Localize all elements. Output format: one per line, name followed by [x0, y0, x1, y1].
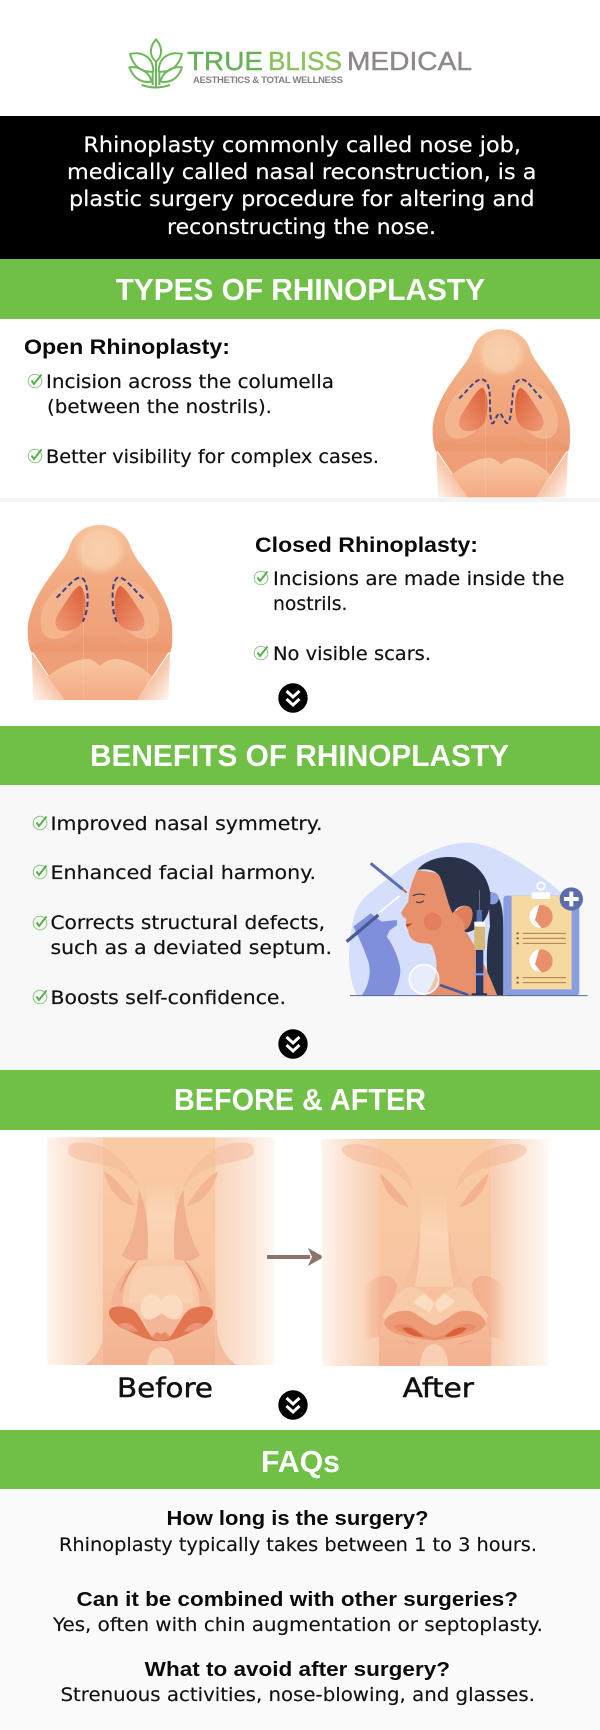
- panel: before and after: [47, 1137, 548, 1420]
- icon: check: [28, 374, 42, 388]
- heading: types of rhinoplasty: TYPES OF RHINOPLASTY: [116, 272, 485, 307]
- clipboard: [503, 896, 579, 996]
- icon: check: [33, 816, 47, 830]
- intro text: plastic surgery procedure for altering and: [69, 187, 535, 211]
- intro text: medically called nasal reconstruction, is a: [67, 160, 536, 184]
- intro text: reconstructing the nose.: [167, 215, 436, 239]
- nose illustration: closed incision: [28, 524, 172, 700]
- hair: [417, 857, 490, 932]
- bullet text: Incision across the columella: [46, 371, 334, 393]
- bullet text: [273, 568, 564, 615]
- faq 2: Can it be combined with other surgeries?: [76, 1588, 518, 1611]
- illustration: surgeon hand, patient profile and clipboard: [347, 843, 588, 996]
- icon: leaf logo: [129, 39, 182, 87]
- illustration: nose before: [47, 1137, 275, 1365]
- logo wordmark: AESTHETICS & TOTAL WELLNESS: [193, 75, 343, 86]
- after label: After: [403, 1373, 475, 1404]
- logo wordmark: MEDICAL: [347, 46, 472, 76]
- bullet text: (between the nostrils).: [47, 396, 272, 418]
- heading: benefits of rhinoplasty: BENEFITS OF RHINOPLASTY: [90, 738, 509, 773]
- open rhinoplasty heading: Open Rhinoplasty:: [24, 336, 230, 359]
- faq 1: How long is the surgery?: [166, 1507, 428, 1530]
- bullet text: [46, 371, 334, 418]
- logo wordmark: TRUE: [187, 46, 263, 76]
- panel: open rhinoplasty: [0, 328, 600, 502]
- icon: check: [33, 990, 47, 1004]
- syringe: [478, 890, 480, 910]
- ponytail: [487, 892, 503, 996]
- ground: [350, 994, 588, 997]
- icon: chevron down: [278, 683, 308, 713]
- closed rhinoplasty heading: Closed Rhinoplasty:: [255, 534, 478, 557]
- pencil: [371, 863, 403, 889]
- logo wordmark: [187, 46, 472, 86]
- faq 2: Yes, often with chin augmentation or septoplasty.: [52, 1614, 543, 1636]
- benefit text: Corrects structural defects,: [50, 912, 325, 934]
- faq 3: What to avoid after surgery?: [145, 1658, 450, 1681]
- panel: faqs: [0, 1489, 600, 1730]
- heading: benefits of rhinoplasty: [0, 726, 600, 785]
- heading: faqs: [0, 1430, 600, 1489]
- illustration: nose after: [322, 1139, 548, 1366]
- neck and face: [401, 870, 497, 996]
- faq 3: Strenuous activities, nose-blowing, and glasses.: [60, 1684, 535, 1706]
- bullet text: nostrils.: [273, 593, 348, 615]
- benefit text: such as a deviated septum.: [50, 937, 332, 959]
- benefit text: [50, 912, 332, 959]
- icon: check: [254, 646, 268, 660]
- magnifier: [409, 965, 439, 994]
- bullet text: No visible scars.: [273, 643, 431, 665]
- faq 1: [59, 1507, 537, 1556]
- icon: check: [33, 865, 47, 879]
- icon: check: [33, 916, 47, 930]
- panel: benefits: [0, 785, 600, 1070]
- icon: chevron down: [278, 1029, 308, 1059]
- faq 1: Rhinoplasty typically takes between 1 to 3 hours.: [59, 1534, 537, 1556]
- panel: closed rhinoplasty: [28, 524, 564, 713]
- icon: chevron down: [278, 1390, 308, 1420]
- benefit text: Enhanced facial harmony.: [50, 862, 316, 884]
- nose illustration: open incision: [433, 328, 570, 497]
- heading: before and after: BEFORE & AFTER: [174, 1082, 426, 1117]
- faq 2: [52, 1588, 543, 1636]
- arrow: [267, 1248, 324, 1266]
- before label: Before: [117, 1373, 213, 1404]
- intro panel: [0, 116, 600, 259]
- scalpel: [378, 896, 399, 913]
- benefit text: Boosts self-confidence.: [50, 987, 286, 1009]
- icon: check: [28, 449, 42, 463]
- heading: types of rhinoplasty: [0, 259, 600, 319]
- glove: [353, 913, 400, 996]
- icon: check: [254, 571, 268, 585]
- faq 3: [60, 1658, 535, 1706]
- intro text: [67, 133, 536, 239]
- logo wordmark: BLISS: [268, 46, 342, 76]
- intro text: Rhinoplasty commonly called nose job,: [83, 133, 521, 157]
- heading: before and after: [0, 1070, 600, 1130]
- divider strip: [0, 498, 600, 502]
- logo: [129, 39, 472, 87]
- bullet text: Better visibility for complex cases.: [46, 446, 379, 468]
- heading: faqs: FAQs: [261, 1444, 340, 1479]
- bullet text: Incisions are made inside the: [273, 568, 564, 590]
- benefit text: Improved nasal symmetry.: [50, 813, 322, 835]
